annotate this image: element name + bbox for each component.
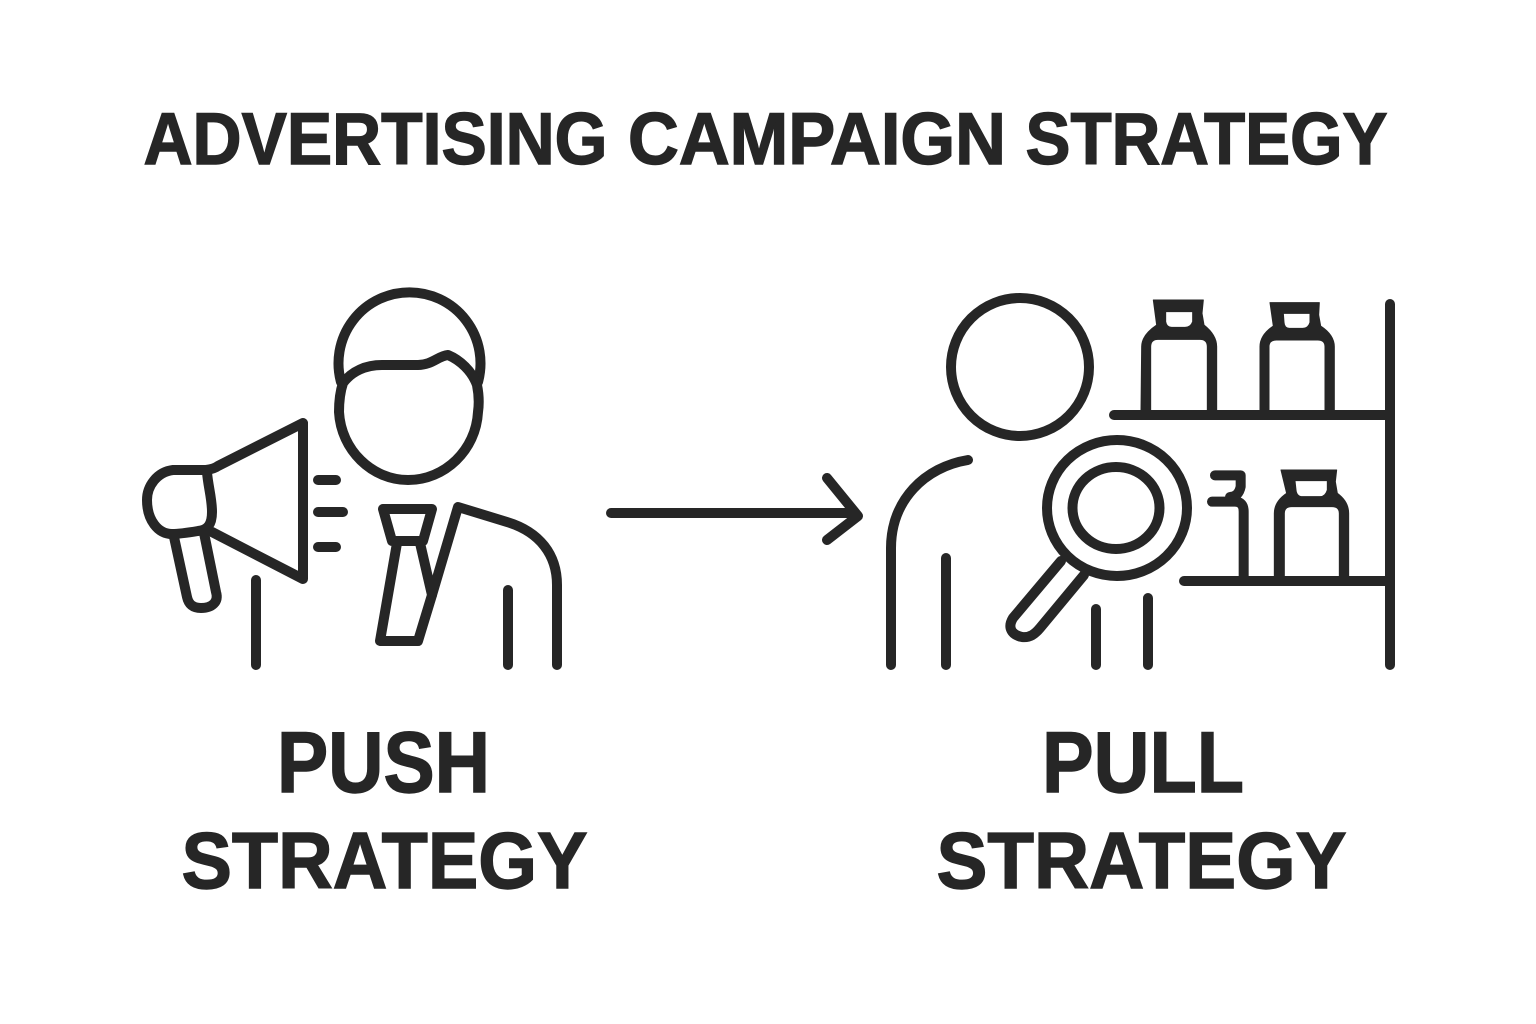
pull label: STRATEGY <box>936 816 1346 905</box>
magnifying glass <box>1010 440 1187 637</box>
face <box>339 355 479 480</box>
arrow <box>611 478 858 540</box>
hair <box>339 292 481 382</box>
bottle top right <box>1260 303 1334 412</box>
bottle bottom right <box>1274 470 1349 578</box>
title: STRATEGY <box>1026 99 1388 180</box>
shelves <box>1114 304 1390 665</box>
tie <box>380 509 432 641</box>
icon: push strategy person with megaphone <box>147 292 557 665</box>
icon: pull strategy person with magnifier and shelves <box>891 298 1390 665</box>
megaphone handle <box>174 533 217 608</box>
sound lines <box>318 480 343 547</box>
megaphone <box>147 423 303 579</box>
suit <box>432 507 557 665</box>
push label: PUSH <box>277 715 490 811</box>
title <box>144 99 1388 180</box>
title: CAMPAIGN <box>628 99 1006 180</box>
bottle top left <box>1141 300 1217 412</box>
bottle bottom left partial <box>1212 475 1244 577</box>
title: ADVERTISING <box>144 99 608 180</box>
push label: STRATEGY <box>182 816 588 905</box>
pull label <box>936 715 1346 905</box>
person <box>891 298 1148 665</box>
pull label: PULL <box>1042 715 1244 811</box>
push label <box>182 715 588 905</box>
bottles <box>1141 300 1349 578</box>
